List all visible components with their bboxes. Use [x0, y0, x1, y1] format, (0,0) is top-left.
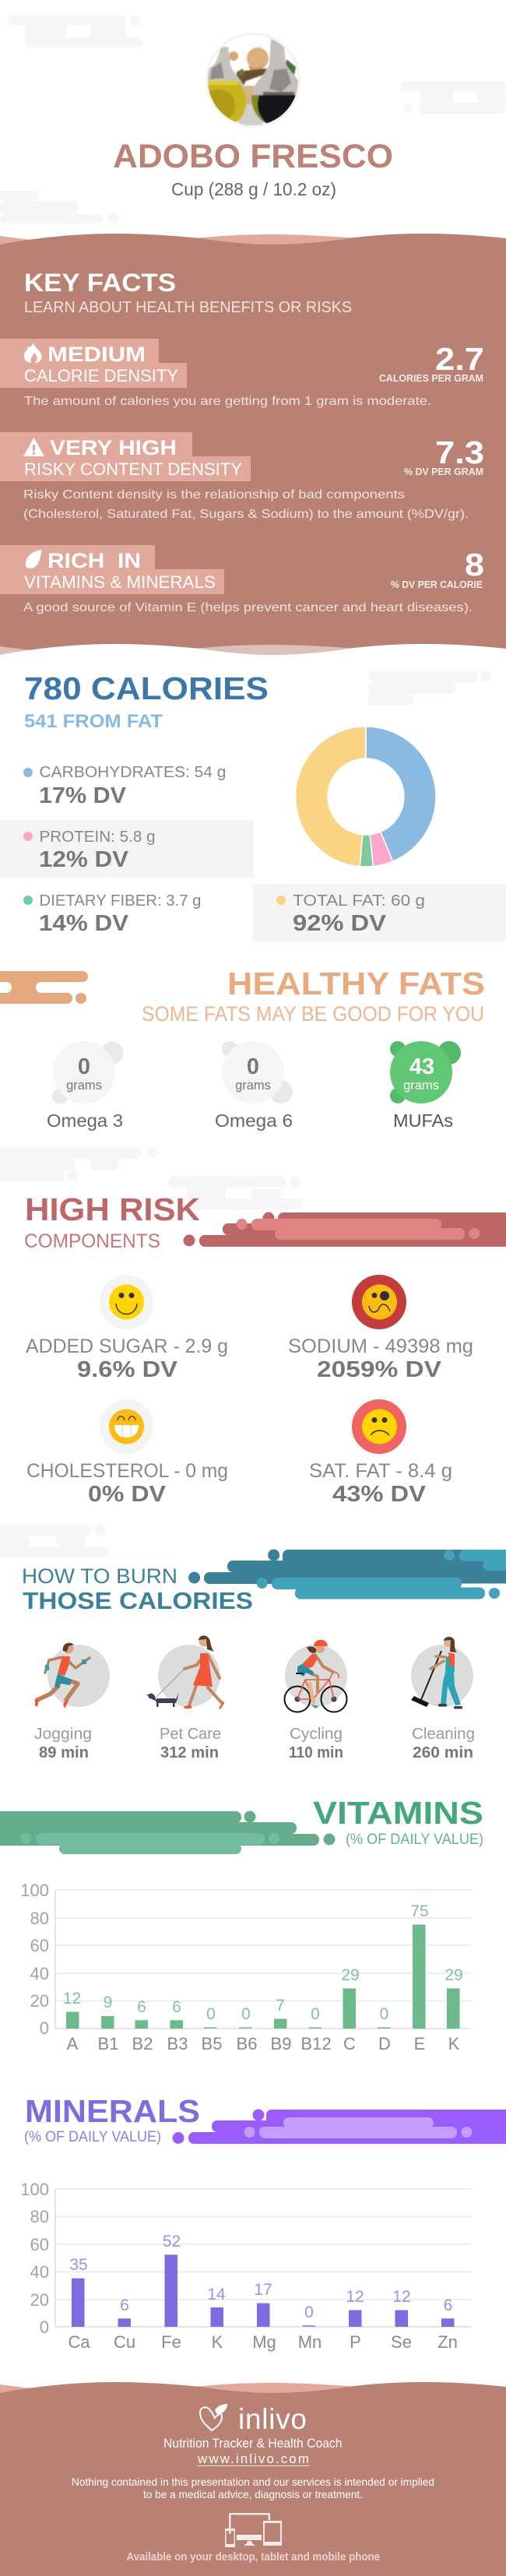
background cloud: calories [368, 671, 491, 706]
calorie density fact: The amount of calories you are getting from 1 gram is moderate. [24, 395, 431, 408]
bar chart: vitamins: 12 [63, 1990, 81, 2008]
bar chart: minerals: 6 [120, 2296, 129, 2314]
bar chart: vitamins: 100 [20, 1881, 49, 1900]
component: saturated fat: 43% DV [332, 1482, 427, 1507]
icon: sad face [362, 1409, 397, 1444]
logo wordmark: inlivo [238, 2403, 307, 2435]
bar chart: vitamins: B9 [271, 2034, 291, 2053]
calorie density fact: 2.7 [435, 341, 484, 377]
omega 6 badge [215, 1041, 293, 1131]
website link: www.inlivo.com [197, 2451, 309, 2466]
tagline: Nutrition Tracker & Health Coach [163, 2436, 343, 2451]
bar chart: vitamins: A [67, 2034, 79, 2053]
bar chart: vitamins: 6 [172, 1998, 181, 2016]
right bottle glass [251, 39, 300, 97]
vitamins and minerals fact: VITAMINS & MINERALS [24, 572, 216, 592]
component: sodium: SODIUM - 49398 mg [288, 1336, 473, 1357]
subheading: vitamins: (% OF DAILY VALUE) [346, 1832, 483, 1848]
legend: protein [0, 820, 254, 878]
heading: key facts: KEY FACTS [24, 269, 176, 297]
activity: jogging: Jogging [34, 1726, 92, 1743]
bar chart: minerals: 35 [69, 2256, 88, 2274]
icon: cyclist [285, 1640, 347, 1712]
omega 6 badge: Omega 6 [215, 1110, 293, 1131]
calorie density fact: CALORIE DENSITY [24, 366, 178, 385]
subheading: minerals: (% OF DAILY VALUE) [24, 2129, 161, 2145]
omega 3 badge: 0 [78, 1054, 90, 1079]
bar chart: minerals: Fe [161, 2332, 181, 2352]
bar chart: minerals: 17 [254, 2281, 272, 2299]
component: added sugar [26, 1275, 228, 1382]
icon: warning triangle [23, 438, 44, 456]
panel: footer [0, 2382, 506, 2576]
heading: those calories: THOSE CALORIES [23, 1587, 253, 1614]
decorative cloud: burn [188, 1550, 506, 1599]
omega 6 badge: 0 [247, 1054, 259, 1079]
panel: key facts [0, 234, 506, 679]
legend: carbohydrates: 17% DV [39, 783, 127, 808]
activity: jogging: 89 min [39, 1744, 89, 1761]
balsamic vinegar [251, 95, 300, 125]
heading: how to burn: HOW TO BURN [22, 1564, 177, 1588]
bar chart: vitamins: 0 [380, 2005, 388, 2023]
heading: healthy fats: HEALTHY FATS [227, 966, 485, 1001]
bar chart: minerals: 0 [40, 2317, 49, 2337]
bar chart: vitamins: 9 [104, 1994, 112, 2011]
legend: carbohydrates: CARBOHYDRATES: 54 g [39, 764, 226, 781]
bar chart: minerals: 12 [392, 2288, 411, 2306]
bar chart: vitamins: D [378, 2034, 391, 2053]
vitamins and minerals fact: RICH IN [47, 549, 141, 572]
icon: smiling face [109, 1285, 144, 1319]
bar chart: vitamins: C [343, 2034, 356, 2053]
bar chart: minerals: 60 [30, 2235, 49, 2254]
olive oil [204, 80, 246, 123]
omega 3 badge [47, 1041, 123, 1131]
heading: calories: 780 CALORIES [24, 670, 269, 706]
activity: cycling [285, 1640, 347, 1761]
heading: vitamins: VITAMINS [313, 1795, 483, 1831]
bar chart: minerals: Cu [114, 2332, 135, 2352]
icon: person sweeping [411, 1637, 462, 1709]
bar chart: vitamins: B3 [167, 2034, 188, 2053]
subheading: healthy fats: SOME FATS MAY BE GOOD FOR YOU [142, 1002, 484, 1026]
calorie density fact [0, 339, 484, 408]
activity: cleaning: 260 min [413, 1744, 473, 1761]
risky content density fact: RISKY CONTENT DENSITY [24, 459, 242, 479]
component: cholesterol: CHOLESTEROL - 0 mg [26, 1460, 228, 1482]
bar chart: minerals: Se [391, 2332, 412, 2352]
bar chart: vitamins: 0 [241, 2005, 251, 2023]
vitamins and minerals fact: % DV PER CALORIE [391, 579, 483, 590]
serving size: Cup (288 g / 10.2 oz) [171, 179, 336, 199]
risky content density fact [0, 432, 484, 521]
risky content density fact: VERY HIGH [50, 436, 177, 459]
icon: desktop, tablet and phone [225, 2513, 282, 2547]
activity: cycling: Cycling [290, 1726, 343, 1743]
bar chart: vitamins: 40 [30, 1964, 49, 1983]
bar chart: minerals: 12 [346, 2288, 364, 2306]
legend: total fat [253, 884, 506, 941]
decorative cloud: minerals [173, 2109, 506, 2144]
legend: protein: 12% DV [39, 847, 129, 872]
component: added sugar: 9.6% DV [77, 1357, 178, 1382]
calorie density fact: MEDIUM [47, 343, 146, 366]
disclaimer: to be a medical advice, diagnosis or treatment. [143, 2488, 363, 2500]
bar chart: vitamins: 0 [206, 2005, 216, 2023]
omega 3 badge: grams [66, 1079, 102, 1093]
legend: dietary fiber [23, 892, 201, 936]
bar chart: vitamins: 29 [341, 1966, 360, 1984]
bar chart: minerals: 52 [163, 2233, 181, 2250]
bar chart: vitamins: 0 [311, 2005, 320, 2023]
risky content density fact: % DV PER GRAM [404, 466, 483, 477]
subheading: key facts: LEARN ABOUT HEALTH BENEFITS OR RISKS [24, 299, 352, 316]
risky content density fact: 7.3 [435, 435, 484, 470]
bar chart: vitamins [20, 1881, 471, 2053]
bar chart: minerals: P [350, 2332, 361, 2352]
bar chart: vitamins: B6 [237, 2034, 257, 2053]
calorie density fact: CALORIES PER GRAM [379, 373, 483, 384]
component: saturated fat [309, 1399, 452, 1507]
disclaimer [72, 2476, 434, 2500]
icon: dog walker [146, 1635, 224, 1709]
bar chart: minerals [20, 2180, 471, 2352]
MUFAs badge: MUFAs [393, 1110, 453, 1131]
activity: pet care: 312 min [160, 1744, 219, 1761]
activity: pet care [146, 1635, 224, 1761]
bar chart: minerals: 14 [207, 2286, 226, 2303]
bar chart: vitamins: 7 [276, 1997, 285, 2015]
decorative cloud: vitamins [0, 1811, 335, 1854]
availability note: Available on your desktop, tablet and mobile phone [126, 2551, 380, 2564]
bar chart: vitamins: E [414, 2034, 425, 2053]
omega 6 badge: grams [235, 1079, 271, 1093]
activity: cycling: 110 min [289, 1744, 343, 1761]
logo: inlivo heart [200, 2404, 227, 2430]
decorative cloud: healthy fats [0, 971, 98, 1004]
bar chart: minerals: Mn [298, 2332, 322, 2352]
food photo: oil and vinegar bottles [204, 33, 300, 129]
background clouds: high risk [0, 1147, 304, 1209]
legend: carbohydrates [23, 764, 226, 808]
MUFAs badge: 43 [409, 1054, 434, 1079]
vitamins and minerals fact [0, 545, 484, 614]
activity: pet care: Pet Care [160, 1726, 221, 1743]
legend: dietary fiber: DIETARY FIBER: 3.7 g [39, 892, 201, 910]
bar chart: minerals: 20 [30, 2290, 49, 2310]
component: cholesterol: 0% DV [88, 1482, 167, 1507]
omega 3 badge: Omega 3 [47, 1110, 123, 1131]
bar chart: minerals: Ca [68, 2332, 90, 2352]
activity: cleaning [411, 1637, 475, 1761]
bar chart: vitamins: 0 [40, 2018, 49, 2038]
vitamins and minerals fact: 8 [465, 547, 484, 582]
bar chart: vitamins: B2 [132, 2034, 153, 2053]
bar chart: minerals: Mg [252, 2332, 276, 2352]
component: sodium: 2059% DV [317, 1357, 442, 1382]
icon: grinning face [109, 1409, 144, 1444]
MUFAs badge: grams [403, 1079, 439, 1093]
bar chart: vitamins: 75 [410, 1902, 429, 1920]
bar chart: vitamins: B5 [202, 2034, 222, 2053]
risky content density fact: Risky Content density is the relationship of bad components [23, 488, 405, 501]
legend: dietary fiber: 14% DV [39, 911, 129, 936]
legend: total fat: TOTAL FAT: 60 g [293, 892, 425, 910]
left bottle glass [204, 47, 246, 92]
icon: queasy face [362, 1285, 397, 1319]
bar chart: vitamins: 20 [30, 1991, 49, 2011]
activity: jogging [34, 1643, 110, 1761]
bar chart: minerals: 100 [20, 2180, 49, 2199]
bar chart: vitamins: B1 [98, 2034, 118, 2053]
icon: leaf [26, 550, 41, 568]
bar chart: minerals: 0 [304, 2303, 314, 2321]
background clouds: header [0, 16, 506, 223]
heading: minerals: MINERALS [25, 2093, 200, 2129]
MUFAs badge [390, 1041, 461, 1131]
bar chart: minerals: Zn [437, 2332, 458, 2352]
component: added sugar: ADDED SUGAR - 2.9 g [26, 1336, 228, 1357]
icon: flame [24, 343, 41, 363]
component: cholesterol [26, 1399, 228, 1507]
bar chart: vitamins: K [448, 2034, 460, 2053]
component: saturated fat: SAT. FAT - 8.4 g [309, 1460, 452, 1482]
icon: jogger [35, 1643, 90, 1709]
bar chart: minerals: K [212, 2332, 223, 2352]
vitamins and minerals fact: A good source of Vitamin E (helps prevent cancer and heart diseases). [23, 601, 473, 614]
bar chart: vitamins: 29 [445, 1966, 463, 1984]
disclaimer: Nothing contained in this presentation and our services is intended or implied [72, 2476, 434, 2488]
bar chart: vitamins: 6 [137, 1998, 146, 2016]
legend: protein: PROTEIN: 5.8 g [39, 829, 156, 846]
subheading: components: COMPONENTS [24, 1230, 160, 1252]
subheading: calories from fat: 541 FROM FAT [24, 711, 163, 732]
activity: cleaning: Cleaning [412, 1726, 475, 1743]
bar chart: minerals: 80 [30, 2207, 49, 2226]
bar chart: minerals: 40 [30, 2262, 49, 2282]
bar chart: minerals: 6 [444, 2296, 452, 2314]
legend: total fat: 92% DV [293, 911, 387, 936]
heading: high risk: HIGH RISK [25, 1191, 200, 1227]
risky content density fact: (Cholesterol, Saturated Fat, Sugars & Sodium) to the amount (%DV/gr). [23, 508, 469, 521]
bar chart: vitamins: 80 [30, 1909, 49, 1928]
bar chart: vitamins: B12 [300, 2034, 332, 2053]
decorative cloud: high risk [184, 1212, 506, 1247]
title: ADOBO FRESCO [113, 138, 393, 175]
bar chart: vitamins: 60 [30, 1936, 49, 1955]
component: sodium [288, 1275, 473, 1382]
donut chart: macronutrients [296, 727, 436, 867]
background cloud: burn [0, 1525, 108, 1557]
